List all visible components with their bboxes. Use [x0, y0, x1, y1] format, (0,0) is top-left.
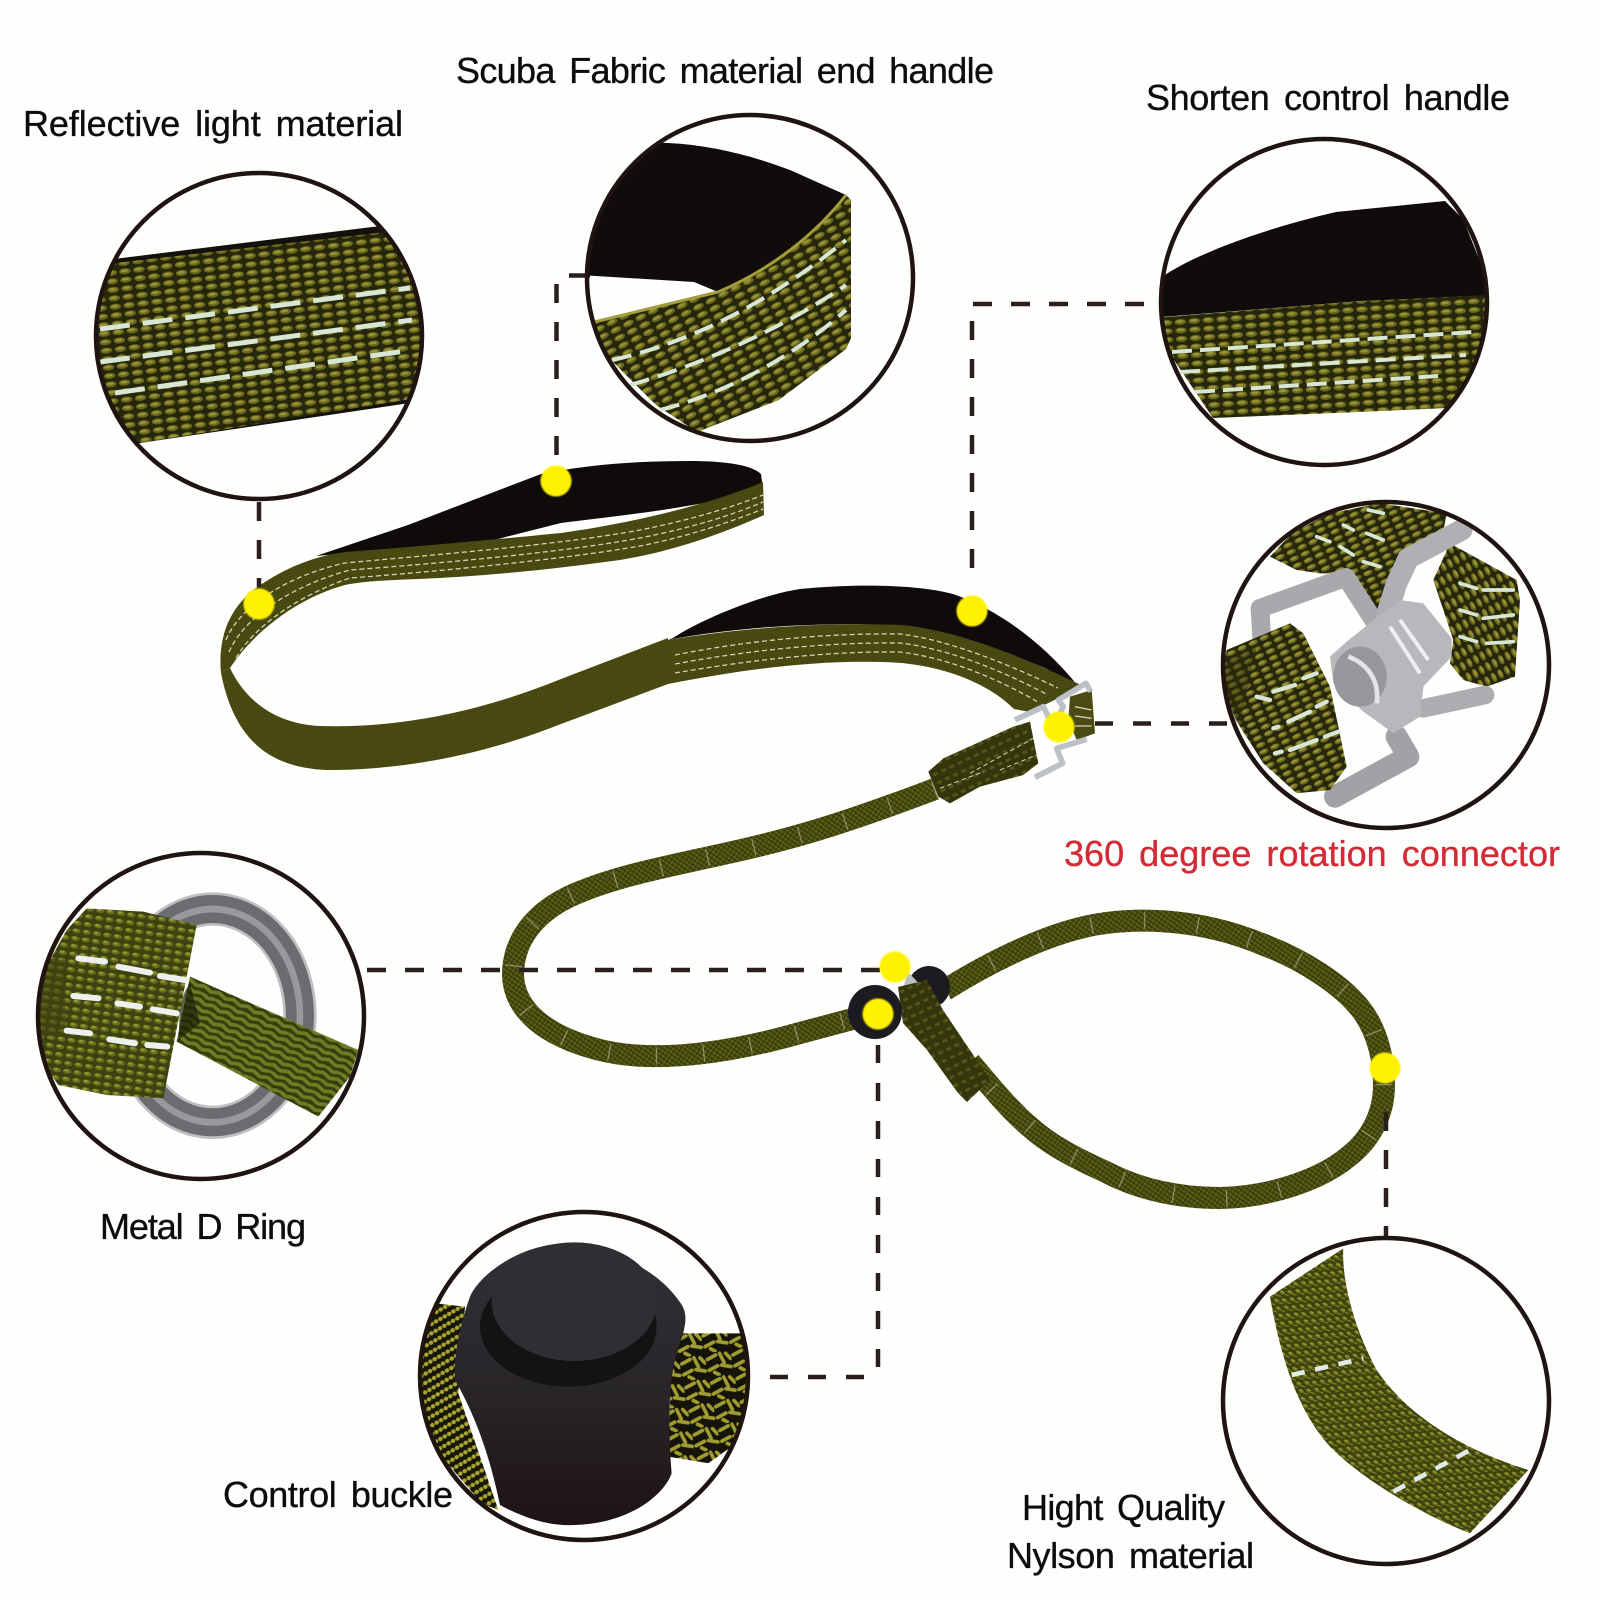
- lens ring: [1161, 139, 1487, 465]
- sleeve: [898, 980, 990, 1102]
- leash: slip loop: [945, 921, 1384, 1198]
- panel: reflective light detail: [90, 173, 430, 499]
- lens ring: [1223, 1238, 1549, 1564]
- lens ring: [587, 115, 913, 441]
- lens ring: [420, 1212, 748, 1540]
- rope close-up: [1270, 1248, 1528, 1533]
- handle close-up: [580, 140, 851, 432]
- label: high quality nylon material: [1007, 1487, 1254, 1576]
- panel: nylon material detail: [1223, 1238, 1549, 1564]
- label: high quality nylon material: Nylson material: [1007, 1535, 1254, 1576]
- label: scuba fabric handle: Scuba Fabric material end handle: [456, 50, 994, 91]
- label: metal d ring: Metal D Ring: [100, 1206, 306, 1247]
- end handle band: [220, 482, 764, 673]
- leash: handle strap: [220, 461, 1083, 770]
- lens ring: [1223, 502, 1549, 828]
- panel: scuba fabric detail: [580, 115, 913, 441]
- leash: traffic rope: [513, 789, 935, 1056]
- control handle neoprene: [668, 586, 1078, 686]
- dashed leaders: [259, 276, 1386, 1377]
- webbing close-up: [90, 222, 430, 450]
- leash: slip sleeve and buckles: [848, 966, 990, 1102]
- panel: 360 degree connector detail: [1220, 502, 1549, 828]
- label: shorten control handle: Shorten control handle: [1146, 77, 1510, 118]
- label: control buckle: Control buckle: [223, 1474, 453, 1515]
- leash: mini connector: [928, 683, 1095, 803]
- panel: control buckle detail: [415, 1212, 750, 1540]
- connector close-up: [1220, 503, 1520, 797]
- rear buckle: [908, 966, 950, 1008]
- panel: metal d ring detail: [30, 853, 364, 1179]
- label: 360 degree connector: 360 degree rotation connector: [1064, 833, 1560, 874]
- control handle stitching: [675, 634, 1058, 702]
- label: high quality nylon material: Hight Quality: [1022, 1487, 1225, 1528]
- end handle stitching: [226, 495, 763, 658]
- control handle band: [668, 624, 1083, 712]
- lower strap: [221, 638, 668, 770]
- end handle neoprene: [316, 461, 763, 556]
- d ring close-up: [30, 908, 358, 1122]
- front buckle: [848, 985, 902, 1039]
- lens ring: [96, 173, 422, 499]
- lens ring: [38, 853, 364, 1179]
- handle close-up: [1150, 201, 1490, 418]
- panel: shorten control handle detail: [1150, 139, 1490, 465]
- marker dots: [244, 466, 1400, 1084]
- buckle close-up: [415, 1242, 750, 1525]
- label: reflective light material: Reflective light material: [23, 103, 403, 144]
